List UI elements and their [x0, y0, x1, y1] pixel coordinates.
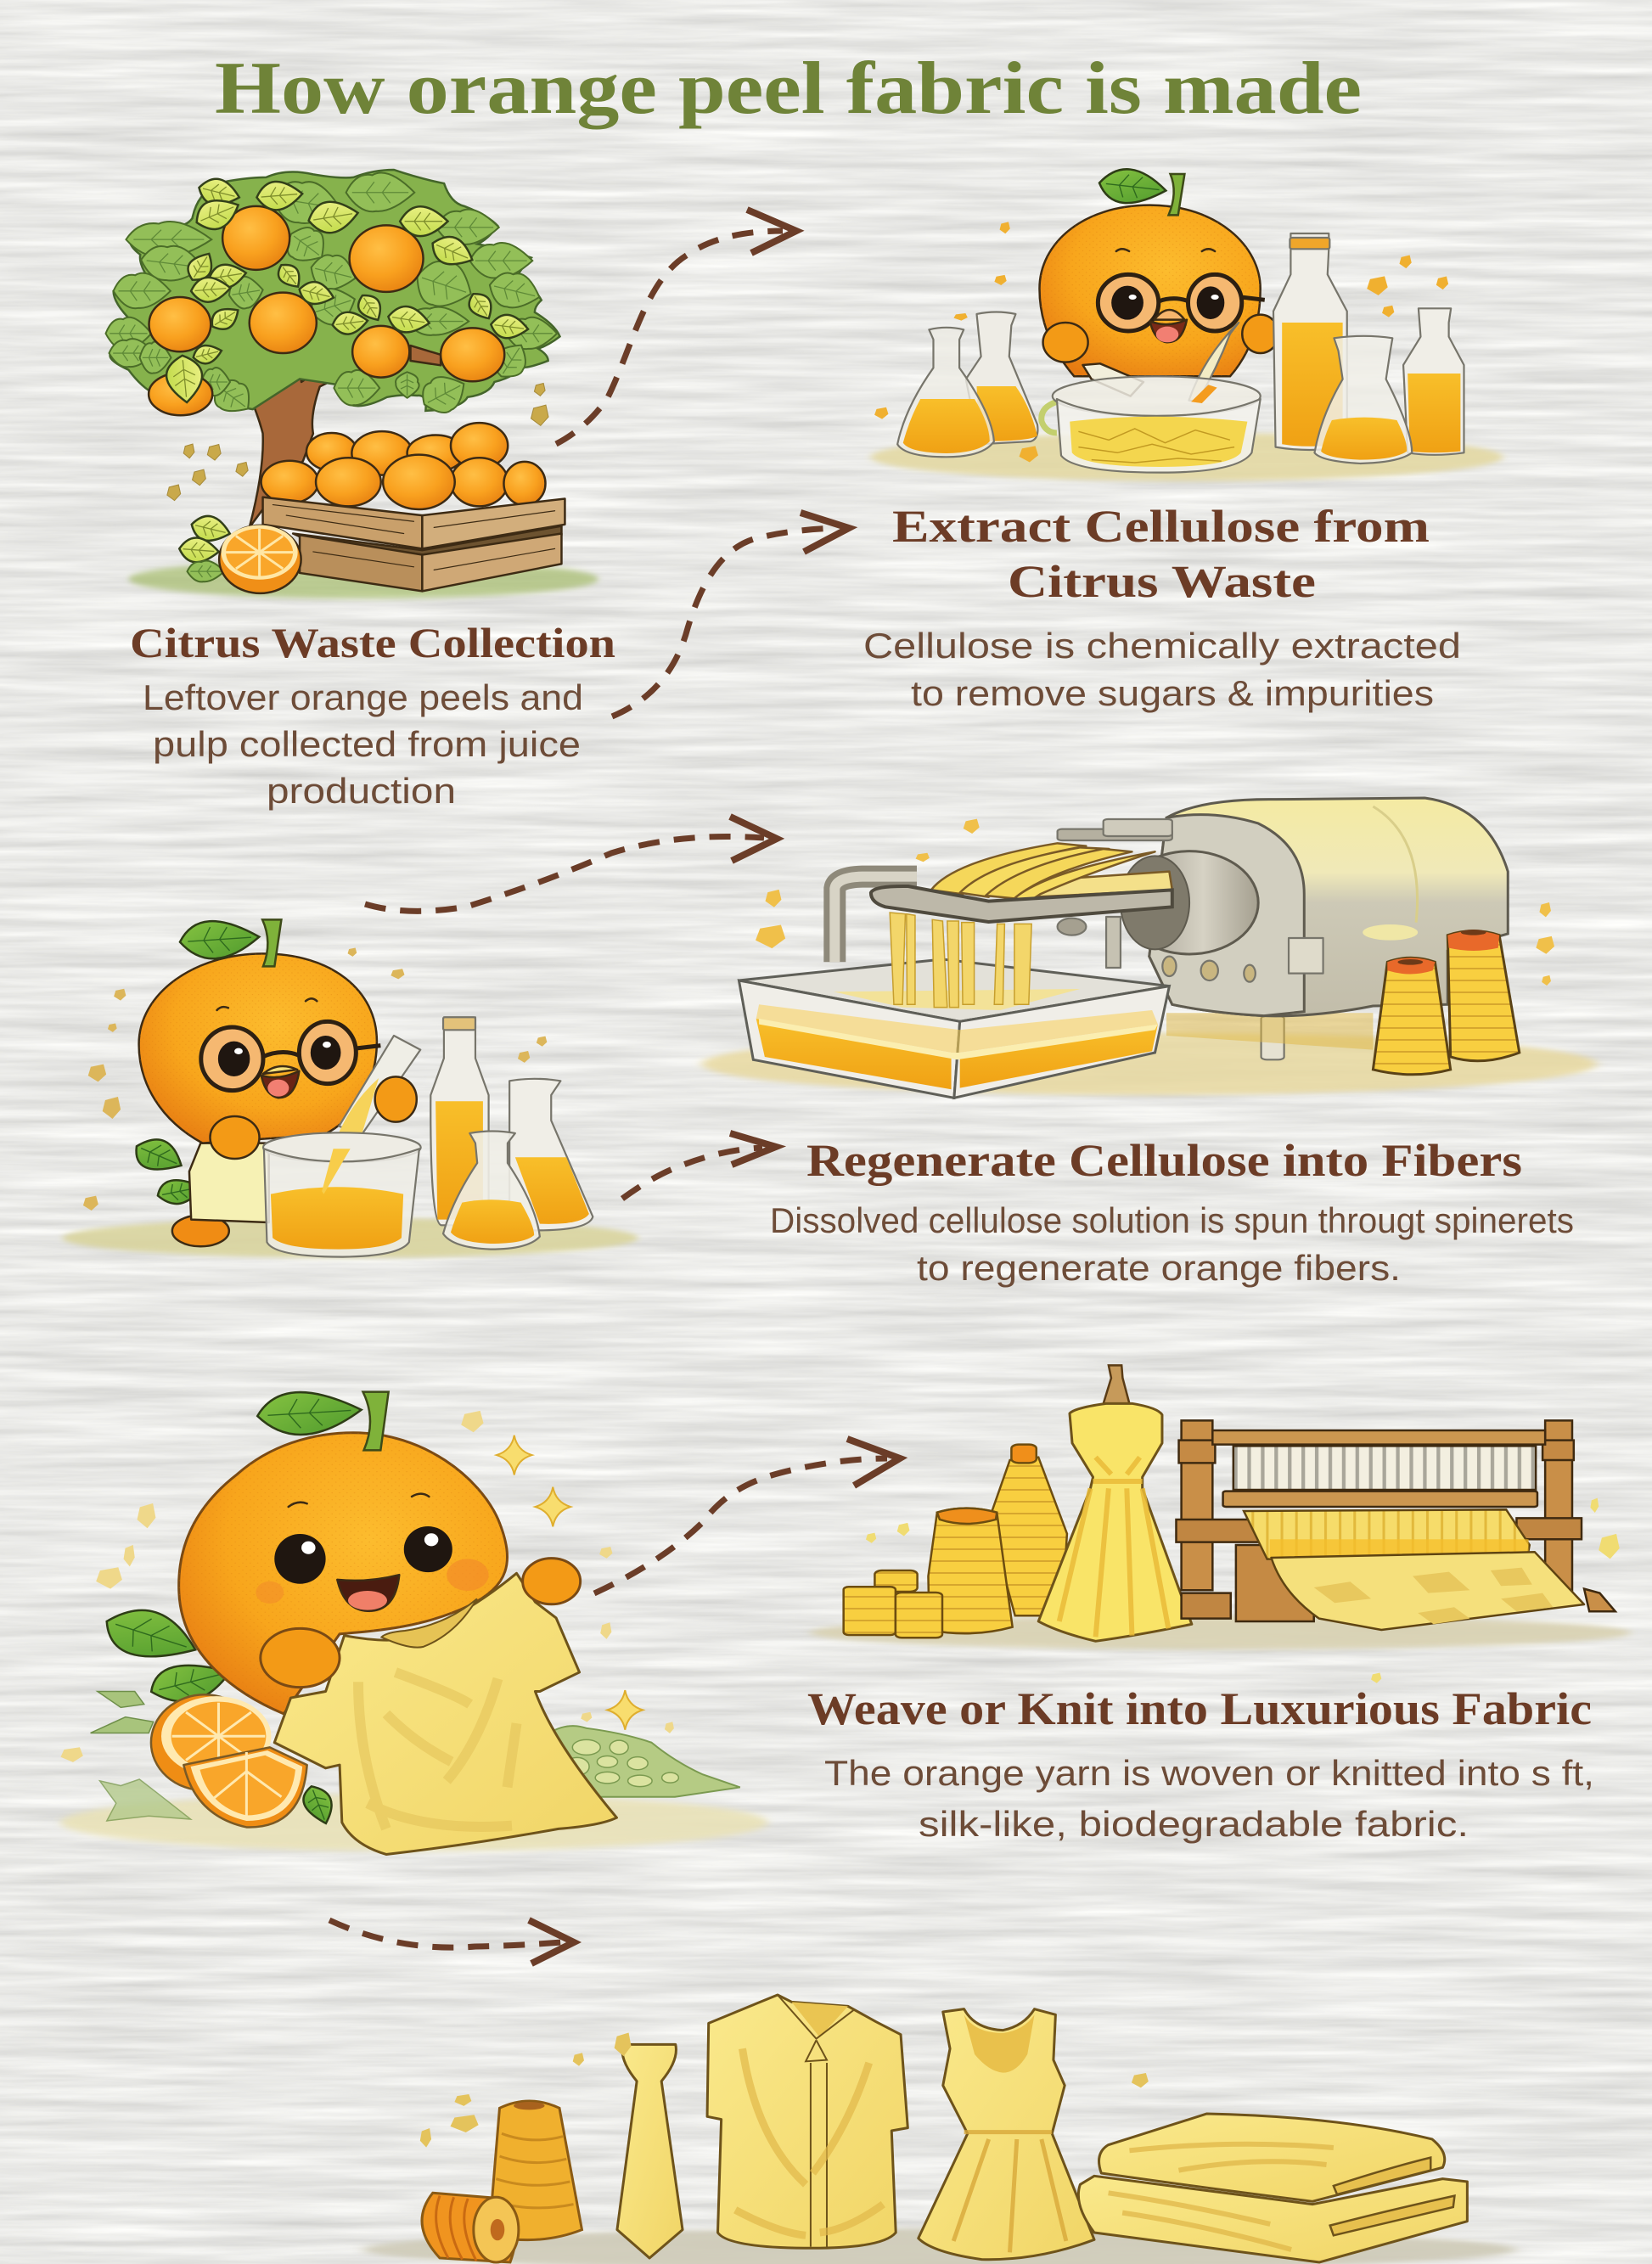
heading: Regenerate Cellulose into Fibers: [806, 1135, 1522, 1186]
shirt: [707, 1995, 907, 2248]
description: to remove sugars & impurities: [911, 673, 1434, 713]
arrow: mascot to loom: [594, 1439, 900, 1593]
step 2 text: [863, 501, 1461, 713]
bottle and flasks: [430, 1017, 593, 1250]
juice flakes: [874, 222, 1448, 462]
description: pulp collected from juice: [153, 724, 581, 764]
step 4 mascot illustration: holding yellow shirt: [60, 1389, 768, 1854]
mascot body: [126, 919, 380, 1246]
arrow: mascot to step 3 text: [622, 1133, 776, 1199]
feed pipe: [834, 877, 917, 962]
arrow: step 1 text to step 2 text: [612, 513, 849, 716]
left flasks: [897, 312, 1037, 457]
fibre ribbons: [931, 843, 1172, 900]
step 4 illustration: yarn, dress form and loom: [810, 1365, 1631, 1683]
glass tray front with pulp: [739, 980, 1169, 1098]
folded fabric stack: [1078, 2114, 1467, 2262]
sparkles: [497, 1435, 643, 1730]
fibre flakes: [756, 819, 1554, 986]
step 4 text: [807, 1683, 1594, 1844]
description: Cellulose is chemically extracted: [863, 626, 1461, 666]
description: [824, 1753, 1594, 1844]
description: Leftover orange peels and: [143, 677, 583, 717]
woven cloth on loom: [1244, 1509, 1615, 1630]
step 3 mascot illustration: dissolving cellulose: [62, 919, 638, 1258]
yarn cone: [489, 2101, 582, 2240]
step 1 text: [130, 619, 615, 811]
step 3 illustration: spinning machine, tray and spools: [701, 798, 1597, 1098]
necktie: [617, 2044, 683, 2258]
step 2 illustration: mascot with lab glassware: [871, 166, 1503, 481]
test tube and pour: [331, 1036, 420, 1152]
yarn spools: [1373, 930, 1520, 1075]
glass tray back and surface: [739, 959, 1169, 1021]
peel flakes: [83, 947, 547, 1211]
peel flakes: [167, 383, 548, 501]
fabric flakes: [420, 2032, 1149, 2148]
yellow shirt: [274, 1573, 616, 1854]
cut orange and leaves: [178, 513, 301, 593]
right bottles: [1273, 233, 1464, 463]
description: Dissolved cellulose solution is spun througt spinerets: [770, 1200, 1574, 1240]
spinneret manifold: [871, 886, 1172, 922]
step 5 illustration: finished fabric products: [362, 1995, 1516, 2264]
falling fibre streams: [890, 913, 1031, 1008]
mixing bowl: [1042, 323, 1261, 473]
description: [863, 626, 1461, 713]
machine body: [1149, 798, 1508, 1059]
sleeveless dress: [919, 2009, 1094, 2260]
title: How orange peel fabric is made: [215, 48, 1362, 130]
machine front ring: [1058, 819, 1258, 954]
tree canopy: [106, 170, 559, 421]
step 3 text: [770, 1135, 1574, 1288]
arrow: to finished products: [329, 1920, 574, 1963]
description: production: [267, 771, 456, 811]
orange slices: [151, 1694, 339, 1828]
step 1 illustration: orange tree and crate: [106, 170, 598, 598]
description: [143, 677, 583, 811]
orange crate: [261, 423, 565, 591]
description: The orange yarn is woven or knitted into s ft,: [824, 1753, 1594, 1793]
heading: Citrus Waste Collection: [130, 619, 615, 666]
arrow: tree to extraction: [556, 210, 796, 444]
mascot hands: [261, 1559, 581, 1688]
green leaves and moss: [91, 1601, 740, 1821]
yarn cones: [844, 1445, 1067, 1638]
dress on mannequin: [1038, 1365, 1192, 1641]
heading: Citrus Waste: [1008, 556, 1316, 607]
heading: Weave or Knit into Luxurious Fabric: [807, 1683, 1592, 1734]
description: to regenerate orange fibers.: [917, 1248, 1401, 1288]
wooden loom: [1176, 1420, 1582, 1621]
arrow: to spinning machine: [365, 817, 777, 911]
beaker: [263, 1132, 421, 1257]
mascot: [1039, 166, 1278, 376]
mascot body: [179, 1389, 508, 1714]
description: [770, 1200, 1574, 1288]
heading: [892, 501, 1430, 607]
small spool: [422, 2193, 519, 2262]
description: silk-like, biodegradable fabric.: [919, 1804, 1469, 1844]
peel flakes: [61, 1411, 674, 1762]
heading: Extract Cellulose from: [892, 501, 1430, 552]
oranges on the tree: [149, 206, 504, 415]
fabric flakes: [866, 1498, 1620, 1683]
